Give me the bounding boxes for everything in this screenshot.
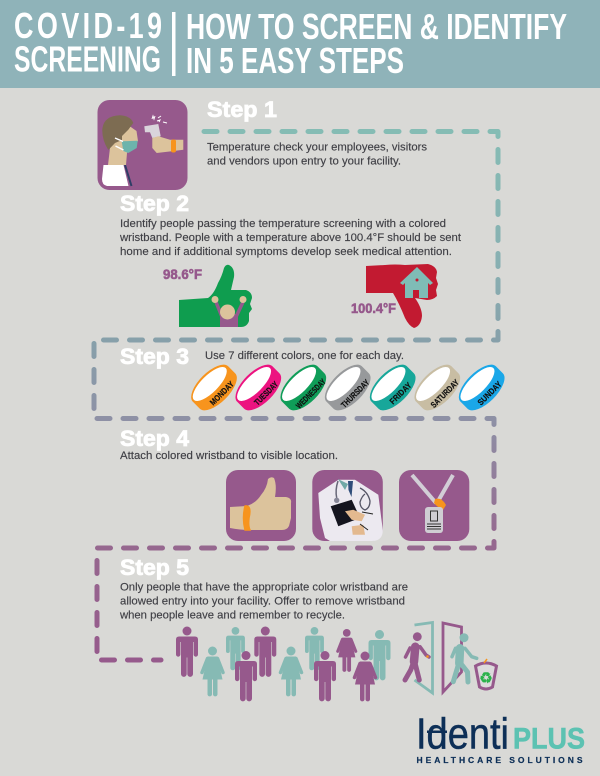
step 2 heading: Step 2 [120, 191, 189, 216]
title: COVID-19 Screening [14, 5, 165, 79]
wristband: Monday: MONDAY [208, 379, 236, 407]
step 2 text: home and if additional symptoms develop seek medical attention. [120, 246, 452, 258]
wristband: Saturday [408, 359, 466, 416]
title: COVID-19 Screening: COVID-19 [14, 5, 165, 46]
title: COVID-19 Screening: SCREENING [14, 38, 161, 80]
label: 98.6F: 98.6°F [163, 266, 202, 282]
wristbands row [185, 359, 511, 416]
crowd of people [176, 626, 390, 701]
wristband: Monday [185, 359, 243, 416]
icon: recycling bin [476, 659, 496, 689]
icon: temperature check [98, 100, 188, 190]
wristband: Sunday [453, 359, 511, 416]
label: 100.4F: 100.4°F [351, 300, 396, 316]
title divider [172, 12, 176, 76]
step 3 text: Use 7 different colors, one for each day. [205, 350, 404, 362]
icon: green thumbs up [179, 265, 252, 327]
step 5 heading: Step 5 [120, 555, 189, 580]
wristband: Wednesday: WEDNESDAY [294, 376, 328, 410]
logo: IdentiPLUS: PLUS [513, 722, 585, 756]
icon: red thumbs down with house [366, 264, 438, 328]
wristband: Friday: FRIDAY [387, 380, 414, 406]
wristband: Tuesday: TUESDAY [252, 379, 280, 407]
recycling symbol: ♻ [479, 669, 493, 687]
icon: doctor with clipboard [312, 470, 383, 541]
logo: IdentiPLUS: HEALTHCARE SOLUTIONS [416, 755, 583, 765]
wristband: Saturday: SATURDAY [428, 377, 461, 410]
step 2 text: wristband. People with a temperature above 100.4°F should be sent [119, 232, 461, 244]
step 4 text: Attach colored wristband to visible location. [120, 450, 338, 462]
step 5 text [119, 582, 408, 622]
icon: wrist with band [226, 470, 296, 541]
step 5 text: Only people that have the appropriate color wristband are [120, 582, 408, 594]
wristband: Sunday: SUNDAY [475, 379, 504, 407]
step 5 text: allowed entry into your facility. Offer to remove wristband [120, 596, 405, 608]
wristband: Wednesday [274, 359, 332, 416]
icon: lanyard badge [399, 470, 469, 541]
step 1 text: and vendors upon entry to your facility. [207, 156, 401, 168]
title: how to screen: IN 5 EASY STEPS [186, 40, 404, 81]
step 4 heading: Step 4 [120, 426, 190, 451]
wristband: Thursday: THURSDAY [339, 377, 372, 410]
wristband: Tuesday [229, 359, 287, 416]
step 1 heading: Step 1 [207, 97, 277, 122]
wristband: Thursday [319, 359, 377, 416]
title: how to screen [186, 6, 567, 81]
step 5 text: when people leave and remember to recycle. [119, 610, 345, 622]
wristband: Friday [364, 359, 422, 416]
step 2 text: Identify people passing the temperature screening with a colored [120, 218, 446, 230]
icon: exit door with person [405, 622, 432, 693]
dashed connector path [94, 132, 498, 660]
header band [0, 0, 600, 88]
logo: IdentiPLUS: Identi [416, 710, 509, 758]
step 2 text [119, 218, 461, 258]
step 1 text: Temperature check your employees, visitors [207, 142, 428, 154]
logo: IdentiPLUS [416, 710, 585, 765]
step 1 text [207, 142, 428, 168]
step 3 heading: Step 3 [120, 344, 189, 369]
icon: entry door with person [443, 623, 477, 692]
